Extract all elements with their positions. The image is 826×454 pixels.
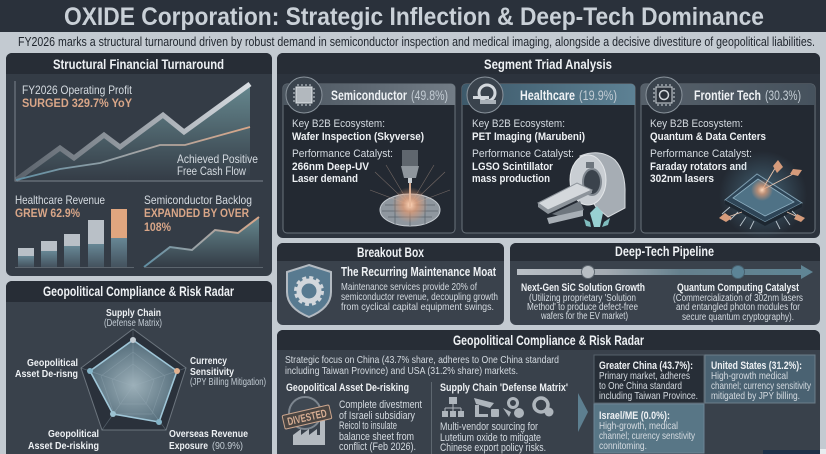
card: healthcare xyxy=(462,77,635,233)
card: frontier tech xyxy=(641,77,815,239)
text: operating profit xyxy=(22,83,133,110)
radar label: asset de-risking: Asset De-risking xyxy=(28,440,99,452)
radar label: supply chain xyxy=(104,307,162,329)
text: free cash flow xyxy=(177,152,258,178)
text: SiC solution growth: Method' to produce defect-free xyxy=(527,302,638,313)
block: supply chain defense matrix xyxy=(440,382,568,454)
text: semiconductor backlog xyxy=(144,193,252,234)
block: supply chain defense matrix: Lutetium oxide to mitigate xyxy=(440,432,541,444)
table cell: greater china xyxy=(594,355,704,403)
text: quantum computing catalyst xyxy=(673,282,803,323)
block: asset de-risking: Geopolitical Asset De-risking xyxy=(286,382,409,394)
card text xyxy=(472,118,585,185)
card text xyxy=(650,118,766,185)
text: semiconductor backlog: 108% xyxy=(144,220,171,234)
card heading: Frontier Tech xyxy=(694,88,761,103)
heading: geopolitical compliance: Geopolitical Compliance & Risk Radar xyxy=(453,332,644,348)
table cell: israel: channel; curency senstivity xyxy=(599,430,696,442)
bar chart: healthcare revenue xyxy=(15,209,134,268)
block: asset de-risking xyxy=(282,382,422,453)
card heading: Healthcare xyxy=(520,88,575,103)
intro text: including Taiwan Province) and USA (31.2% share) markets. xyxy=(285,365,518,377)
card text xyxy=(292,118,424,185)
text: quantum computing catalyst: secure quantum cryptography). xyxy=(682,312,794,323)
illustration: laser on wafer xyxy=(370,150,450,226)
table cell: greater china: Greater China (43.7%): xyxy=(599,360,693,372)
radar label: asset de-risng xyxy=(15,357,78,380)
card text: mass production xyxy=(472,173,550,185)
radar label: asset de-risking: Geopolitical xyxy=(48,428,99,440)
intro text xyxy=(285,354,559,377)
illustration: PET scanner xyxy=(538,153,625,227)
text: SiC solution growth xyxy=(521,282,645,322)
block: supply chain defense matrix: Multi-vendor sourcing for xyxy=(440,421,538,433)
card text: Laser demand xyxy=(292,173,358,185)
table cell: united states: United States (31.2%): xyxy=(711,360,802,372)
text: operating profit: FY2026 Operating Profit xyxy=(22,83,133,97)
block: supply chain defense matrix: Supply Chain 'Defense Matrix' xyxy=(440,382,568,394)
arrow: pipeline timeline xyxy=(517,265,813,279)
card text: Performance Catalyst: xyxy=(650,148,752,160)
card text: 266nm Deep-UV xyxy=(292,161,370,173)
block: asset de-risking: Complete divestment xyxy=(339,399,422,411)
icon: quantum chip xyxy=(646,77,682,113)
radar label: overseas revenue xyxy=(169,428,248,452)
radar label: supply chain: (Defense Matrix) xyxy=(104,318,162,329)
table cell: israel: High-growth, medical xyxy=(599,420,678,432)
block: asset de-risking: balance sheet from xyxy=(339,431,414,443)
callout text: maintenance moat: semiconductor revenue, decoupling growth xyxy=(341,291,498,303)
card text: Key B2B Ecosystem: xyxy=(650,118,743,130)
illustration: quantum chip xyxy=(719,151,807,239)
icon: scanner xyxy=(467,77,503,113)
radar label: overseas revenue: (90.9%) xyxy=(212,440,243,452)
callout text: maintenance moat: The Recurring Maintenance Moat xyxy=(341,264,497,279)
panel: breakout box xyxy=(277,243,504,325)
icon: shield with gear xyxy=(287,265,331,317)
heading: pipeline: Deep-Tech Pipeline xyxy=(615,243,714,259)
heading: risk radar: Geopolitical Compliance & Risk Radar xyxy=(43,283,234,299)
card heading: (19.9%) xyxy=(579,88,617,103)
text: healthcare revenue: Healthcare Revenue xyxy=(15,193,105,207)
block: supply chain defense matrix: Chinese export policy risks. xyxy=(440,442,546,454)
table cell: israel: connitoming. xyxy=(599,440,647,452)
radar chart xyxy=(81,329,186,430)
callout text: maintenance moat: Maintenance services provide 20% of xyxy=(341,281,477,293)
radar label: asset de-risking xyxy=(28,428,99,452)
radar label: asset de-risng: Geopolitical xyxy=(27,357,78,369)
radar label: supply chain: Supply Chain xyxy=(106,307,161,319)
line chart: operating profit xyxy=(15,81,263,181)
table cell: greater china: to One China standard xyxy=(599,380,682,392)
card text: LGSO Scintillator xyxy=(472,161,554,173)
card heading: Semiconductor xyxy=(331,88,408,103)
arrow: to regional table xyxy=(578,393,588,432)
block: asset de-risking: Reicol to insulate xyxy=(339,420,397,432)
radar label: asset de-risng: Asset De-risng xyxy=(15,368,78,380)
card text: Wafer Inspection (Skyverse) xyxy=(292,131,424,143)
intro text: Strategic focus on China (43.7% share, adheres to One China standard xyxy=(285,354,559,366)
heading: structural financial turnaround: Structural Financial Turnaround xyxy=(53,56,224,72)
text: semiconductor backlog: EXPANDED BY OVER xyxy=(144,206,249,220)
area chart: semiconductor backlog xyxy=(144,217,263,268)
text: SiC solution growth: Next-Gen SiC Solution Growth xyxy=(521,282,645,294)
text: SiC solution growth: wafers for the EV market) xyxy=(540,311,628,322)
table cell: israel xyxy=(594,404,704,453)
card text: Performance Catalyst: xyxy=(292,148,393,160)
radar label: currency sensitivity: Sensitivity xyxy=(190,366,234,378)
text: free cash flow: Free Cash Flow xyxy=(177,164,246,178)
card text: Key B2B Ecosystem: xyxy=(292,118,385,130)
radar label: currency sensitivity: (JPY Billing Mitigation) xyxy=(190,377,266,388)
title: OXIDE Corporation: Strategic Inflection & Deep-Tech Dominance xyxy=(64,3,764,31)
heading: breakout box: Breakout Box xyxy=(357,244,424,260)
panel: structural financial turnaround xyxy=(6,53,272,276)
radar label: overseas revenue: Overseas Revenue xyxy=(169,428,248,440)
block: asset de-risking: conflict (Feb 2026). xyxy=(339,441,416,453)
icons: defense matrix xyxy=(442,397,554,418)
text: operating profit: SURGED 329.7% YoY xyxy=(22,96,132,110)
table cell: united states: mitigated by JPY billing. xyxy=(711,390,800,402)
text: SiC solution growth: (Utilizing proprietary 'Solution xyxy=(529,293,636,304)
card text: PET Imaging (Marubeni) xyxy=(472,131,585,143)
text: free cash flow: Achieved Positive xyxy=(177,152,258,166)
table cell: israel: Israel/ME (0.0%): xyxy=(599,410,670,422)
header band xyxy=(0,0,826,32)
card heading: (30.3%) xyxy=(765,88,801,103)
panel: segment triad analysis xyxy=(277,53,820,239)
card text: 302nm lasers xyxy=(650,173,714,185)
text: quantum computing catalyst: and entangled photon modules for xyxy=(676,302,801,313)
radar label: overseas revenue: Exposure xyxy=(169,440,208,452)
block: asset de-risking: of Israeli subsidiary xyxy=(339,410,415,422)
card text: Key B2B Ecosystem: xyxy=(472,118,565,130)
card text: Faraday rotators and xyxy=(650,161,747,173)
radar label: currency sensitivity: Currency xyxy=(190,355,227,367)
table cell: greater china: Primary market, adheres xyxy=(599,370,690,382)
panel: deep-tech pipeline xyxy=(510,243,820,325)
panel: geopolitical risk radar xyxy=(6,281,272,454)
table cell: united states: High-growth medical xyxy=(711,370,788,382)
text: healthcare revenue xyxy=(15,193,105,220)
callout text: maintenance moat xyxy=(341,264,498,313)
card: semiconductor xyxy=(283,77,455,233)
card heading: (49.8%) xyxy=(411,88,448,103)
panel: geopolitical compliance detail xyxy=(277,330,820,454)
table cell: united states xyxy=(705,355,815,403)
icon: chip xyxy=(286,77,322,113)
card text: Performance Catalyst: xyxy=(472,148,574,160)
heading: segment triad: Segment Triad Analysis xyxy=(484,56,612,72)
callout text: maintenance moat: from cyclical capital equipment swings. xyxy=(341,301,494,313)
text: healthcare revenue: GREW 62.9% xyxy=(15,206,80,220)
radar label: currency sensitivity xyxy=(190,355,266,388)
table cell: greater china: including Taiwan Province. xyxy=(599,390,698,402)
card text: Quantum & Data Centers xyxy=(650,131,766,143)
icon: divested factory: DIVESTED xyxy=(286,408,328,428)
text: semiconductor backlog: Semiconductor Backlog xyxy=(144,193,252,207)
